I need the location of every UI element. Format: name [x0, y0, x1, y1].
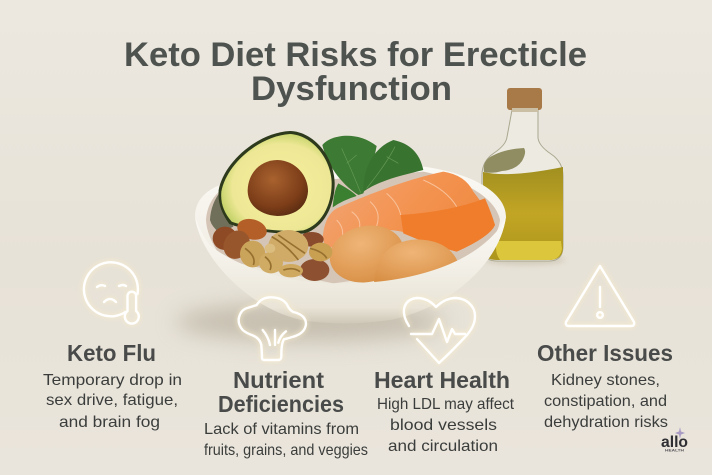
bowl front lip	[195, 217, 506, 323]
icon: heart with pulse	[404, 298, 475, 363]
icon: broccoli	[239, 297, 306, 360]
panel: keto flu: sex drive, fatigue,	[46, 392, 178, 409]
panel: heart health: High LDL may affect	[377, 396, 515, 413]
panel: other issues	[537, 340, 673, 431]
logo: allo health: HEALTH	[665, 448, 685, 452]
panel: heart health: Heart Health	[374, 367, 510, 393]
panel: nutrient deficiencies: Nutrient	[233, 367, 324, 393]
panel: other issues: dehydration risks	[544, 414, 668, 431]
panel: keto flu	[43, 340, 182, 431]
panel: heart health: blood vessels	[390, 417, 497, 434]
panel: keto flu: Temporary drop in	[43, 372, 182, 389]
spinach	[322, 136, 423, 207]
nuts: almonds and walnuts	[213, 216, 332, 281]
avocado	[219, 131, 335, 234]
bowl with food	[195, 131, 506, 323]
panel: nutrient deficiencies	[204, 367, 368, 459]
bowl back	[195, 167, 506, 323]
icon: olive oil bottle	[482, 88, 563, 261]
title: Dysfunction	[251, 70, 452, 108]
panel: nutrient deficiencies: Deficiencies	[218, 391, 344, 417]
eggs	[324, 219, 459, 289]
avocado pit	[248, 160, 308, 216]
panel: nutrient deficiencies: fruits, grains, and veggies	[204, 442, 368, 459]
panel: other issues: Other Issues	[537, 340, 673, 366]
title	[124, 36, 587, 108]
panel: nutrient deficiencies: Lack of vitamins from	[204, 421, 359, 438]
icon: sick face with thermometer	[84, 262, 139, 324]
salmon	[323, 172, 495, 252]
panel: heart health: and circulation	[388, 438, 498, 455]
shadow: bowl and bottle on table	[175, 255, 565, 342]
logo: allo health	[661, 427, 688, 452]
panel: other issues: constipation, and	[544, 393, 667, 410]
title: Keto Diet Risks for Erecticle	[124, 36, 587, 74]
icon: warning triangle	[566, 266, 634, 326]
panel: heart health	[374, 367, 515, 455]
logo: allo health: allo	[661, 434, 688, 451]
panel: keto flu: Keto Flu	[67, 340, 156, 366]
panel: other issues: Kidney stones,	[551, 372, 660, 389]
panel: keto flu: and brain fog	[59, 414, 160, 431]
